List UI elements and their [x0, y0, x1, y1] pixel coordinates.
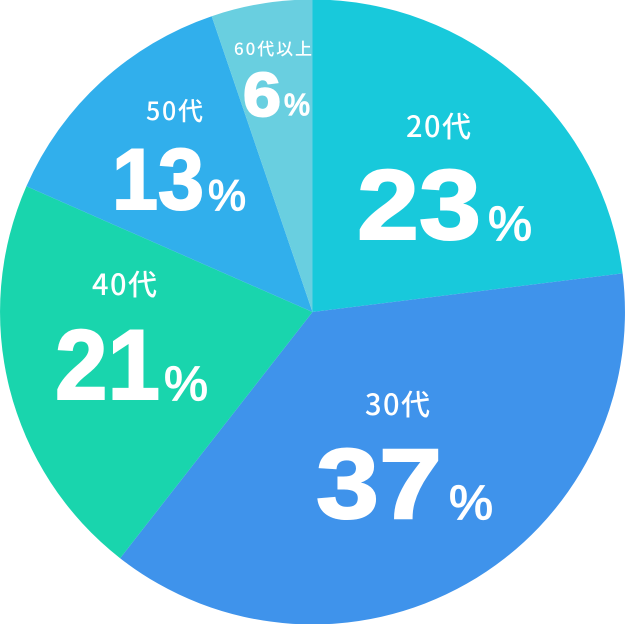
- segment: 50s: 50代: [146, 92, 203, 128]
- segment: 60s and over: %: [284, 87, 310, 122]
- segment: 40s: 21: [55, 309, 160, 420]
- segment: 40s: [0, 186, 313, 558]
- segment: 20s: 23: [357, 149, 481, 260]
- segment: 40s: 40代: [92, 262, 157, 304]
- segment: 30s: [120, 273, 625, 624]
- segment: 30s: %: [449, 477, 493, 530]
- segment: 20s: %: [488, 198, 532, 251]
- segment: 40s: %: [164, 358, 208, 411]
- segment: 30s: 30代: [365, 382, 430, 424]
- segment: 60s and over: [212, 0, 312, 312]
- segment: 30s: 37: [316, 428, 442, 539]
- segment: 60s and over: 6: [243, 61, 281, 130]
- segment: 20s: 20代: [406, 104, 471, 146]
- segment: 60s and over: 60代以上: [234, 35, 312, 60]
- segment: 20s: [312, 0, 623, 312]
- segment: 50s: [26, 16, 313, 312]
- segment: 50s: 13: [112, 132, 204, 228]
- segment: 50s: %: [208, 171, 246, 220]
